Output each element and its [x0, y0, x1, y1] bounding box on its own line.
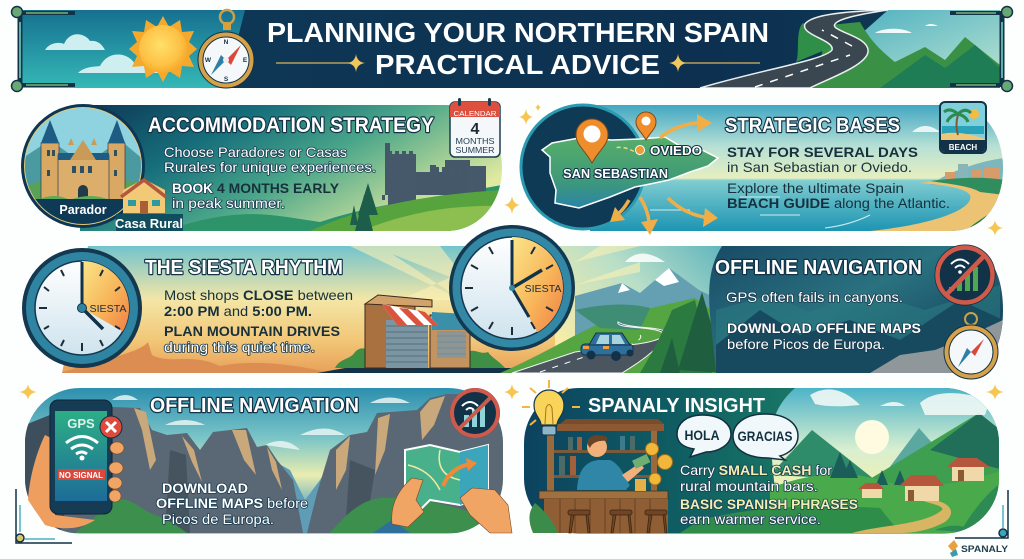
icon: orange arrows: [610, 114, 718, 235]
panel: spanaly insight: [522, 380, 1003, 534]
icon: car: [581, 333, 634, 361]
landscape: hills and castle: [165, 143, 502, 231]
text block: [680, 462, 858, 527]
text block: STAY FOR SEVERAL DAYS: [727, 144, 918, 160]
dark right section: [709, 246, 1003, 373]
text block: siesta: PLAN MOUNTAIN DRIVES: [164, 323, 340, 339]
text block: 4 MONTHS EARLY: [217, 180, 340, 196]
text block: [727, 144, 950, 211]
icon: casa rural: [115, 179, 183, 231]
icon: paper map with hands: [373, 445, 512, 533]
icon: clouds: [45, 34, 160, 73]
text block: offline navigation: before Picos de Europa.: [727, 336, 885, 352]
panel: strategic bases: [521, 102, 1005, 235]
icon: compass: [198, 10, 254, 88]
text block: BOOK: [172, 180, 213, 196]
banner: title header: [12, 6, 1012, 92]
title: [267, 17, 769, 80]
icon: bar with bartender: [529, 419, 668, 533]
map labels: SAN SEBASTIAN: [563, 167, 668, 181]
text block: offline navigation: [726, 289, 921, 352]
heading: ACCOMMODATION STRATEGY: [148, 114, 434, 137]
banner background: [20, 10, 1000, 88]
icon: beach badge: BEACH: [949, 143, 977, 152]
text block: Explore the ultimate Spain: [727, 180, 904, 196]
icon: phone with hand: GPS: [67, 416, 95, 431]
stack of coins: [635, 479, 646, 491]
banner frame left: [12, 6, 75, 92]
far blue cliffs: [280, 464, 322, 533]
bushes: [75, 500, 187, 533]
icon: calendar: CALENDAR: [454, 109, 497, 118]
text block: [164, 144, 376, 211]
icon: large siesta clock: SIESTA: [524, 284, 562, 295]
text block: offline navigation: DOWNLOAD OFFLINE MAPS: [727, 320, 921, 336]
clouds: [112, 395, 410, 450]
text block: siesta: [164, 287, 353, 355]
icon: no signal sign: [935, 245, 995, 305]
heading: offline navigation: OFFLINE NAVIGATION: [715, 257, 922, 279]
text block: Rurales for unique experiences.: [164, 159, 376, 175]
panel background: [590, 105, 1003, 231]
strip landscape: [60, 246, 1003, 373]
text block: BEACH GUIDE along the Atlantic.: [727, 195, 950, 211]
sky right of clock: [555, 246, 722, 346]
text block: earn warmer service.: [680, 511, 821, 527]
icon: parador circle: [20, 104, 150, 231]
banner left sky: [20, 10, 245, 88]
text block: siesta: during this quiet time.: [164, 339, 315, 355]
panel background: [524, 388, 999, 534]
panel: offline navigation canyon: [25, 388, 512, 534]
text block: siesta: Most shops CLOSE between: [164, 287, 353, 303]
icon: beach badge: [940, 102, 986, 153]
title: PRACTICAL ADVICE: [375, 49, 660, 80]
coast and city: [650, 126, 1005, 231]
icon: left siesta clock: [22, 248, 142, 368]
icon: lightbulb: [522, 380, 580, 435]
heading: the siesta rhythm: THE SIESTA RHYTHM: [145, 257, 343, 279]
icon: large siesta clock: [449, 225, 575, 351]
text block: rural mountain bars.: [680, 478, 818, 494]
icon: compass small: [944, 313, 998, 379]
text block: Picos de Europa.: [162, 511, 274, 527]
panel: accommodation strategy: [20, 98, 502, 231]
text block: OFFLINE MAPS before: [156, 495, 308, 511]
panel background: [25, 388, 503, 534]
decorative corner bracket: bottom right: [955, 490, 1008, 538]
label: Parador: Parador: [59, 203, 107, 217]
houses: [858, 458, 990, 501]
icon: sun: [129, 16, 197, 82]
right cliffs: [307, 394, 503, 533]
orange hills: [60, 342, 330, 373]
panel: siesta and offline navigation strip: [22, 225, 1003, 379]
banner frame right: [950, 6, 1012, 92]
icon: map pins: [576, 112, 656, 163]
logo: spanaly: [948, 540, 1009, 557]
banner right landscape: [700, 10, 1000, 88]
map labels: OVIEDO: [650, 144, 702, 158]
map labels: [563, 144, 702, 181]
leaf: [529, 503, 558, 533]
canyon cliffs: [25, 394, 503, 533]
icon: calendar: MONTHS: [456, 136, 495, 146]
right mountains: [575, 268, 710, 336]
text block: Carry SMALL CASH for: [680, 462, 832, 478]
heading: OFFLINE NAVIGATION: [150, 395, 359, 417]
text block: in peak summer.: [172, 195, 285, 211]
text block: siesta: 2:00 PM and 5:00 PM.: [164, 303, 312, 319]
heading: SPANALY INSIGHT: [588, 395, 765, 417]
icon: phone with hand: NO SIGNAL: [59, 471, 103, 480]
icon: compass: W: [205, 57, 212, 64]
icon: no signal sign: [450, 388, 500, 438]
icon: calendar: [450, 98, 500, 157]
bartender: [577, 460, 630, 490]
icon: region map circle: [521, 105, 718, 229]
sparkles: [19, 104, 1004, 400]
icon: compass: S: [224, 76, 229, 83]
speech bubble: hola: HOLA: [684, 427, 720, 443]
icon: casa rural: Casa Rural: [115, 217, 183, 231]
panel background: [80, 105, 502, 231]
heading: STRATEGIC BASES: [725, 115, 900, 137]
speech bubble: gracias: [733, 414, 798, 460]
icon: closed shop: [365, 295, 472, 368]
icon: coins: [646, 442, 672, 485]
decorative corner bracket: bottom left: [16, 489, 72, 543]
speech bubble: hola: [677, 415, 731, 457]
text block: Choose Paradores or Casas: [164, 144, 347, 160]
rural landscape: [680, 388, 1003, 533]
text block: offline navigation: GPS often fails in canyons.: [726, 289, 903, 305]
icon: left siesta clock: SIESTA: [90, 304, 127, 315]
stools: [568, 510, 667, 533]
icon: compass: E: [243, 57, 248, 64]
title ornaments: [276, 54, 760, 72]
text block: BASIC SPANISH PHRASES: [680, 496, 858, 512]
text block: in San Sebastian or Oviedo.: [727, 159, 912, 175]
icon: calendar: SUMMER: [456, 145, 494, 155]
icon: compass: N: [224, 39, 229, 46]
speech bubble: gracias: GRACIAS: [738, 428, 792, 444]
bushes and ground: [335, 348, 505, 368]
logo: spanaly: SPANALY: [961, 544, 1009, 555]
strip background left: [62, 246, 600, 373]
left cliffs: [25, 407, 303, 533]
title: PLANNING YOUR NORTHERN SPAIN: [267, 17, 769, 48]
icon: phone with hand: [28, 400, 124, 528]
cliff highlights: [134, 396, 445, 490]
text block: [156, 480, 308, 527]
sun rays: [350, 246, 640, 300]
text block: DOWNLOAD: [162, 480, 248, 496]
icon: calendar: 4: [471, 121, 480, 138]
